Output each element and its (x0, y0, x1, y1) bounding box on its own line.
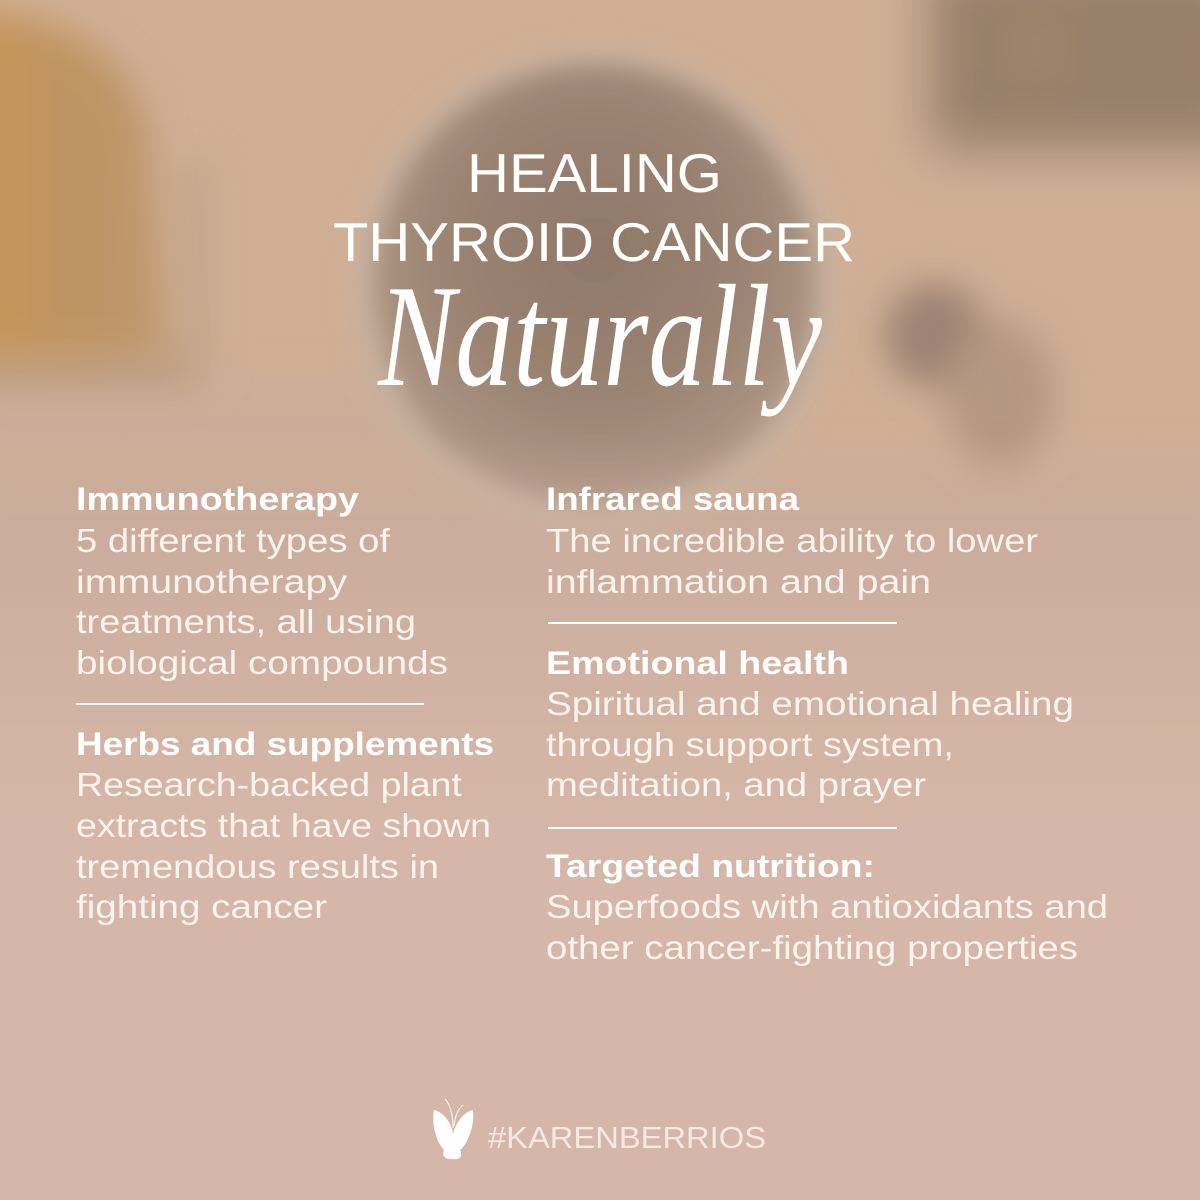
item: emotional health: Spiritual and emotional healing (546, 685, 1074, 722)
item: infrared sauna: inflammation and pain (546, 563, 931, 600)
item: emotional health (546, 645, 1074, 803)
icon: butterfly logo (433, 1099, 473, 1159)
item: targeted nutrition: Superfoods with antioxidants and (546, 888, 1108, 925)
right column (546, 481, 1108, 966)
footer brand (433, 1099, 766, 1159)
item: targeted nutrition: other cancer-fighting properties (546, 929, 1078, 966)
title line: thyroid cancer: THYROID CANCER (333, 211, 855, 273)
item: infrared sauna: The incredible ability to lower (546, 522, 1038, 559)
title line: healing: HEALING (467, 142, 722, 204)
item: herbs and supplements: Research-backed plant (76, 766, 462, 803)
title (333, 142, 855, 417)
item: targeted nutrition (546, 848, 1108, 966)
item: herbs and supplements: tremendous results in (76, 848, 439, 885)
left column (76, 481, 494, 925)
script word: naturally: Naturally (376, 255, 822, 417)
item: herbs and supplements: extracts that have shown (76, 807, 491, 844)
item: immunotherapy (76, 481, 448, 681)
item: immunotherapy: Immunotherapy (76, 481, 359, 517)
item: emotional health: meditation, and prayer (546, 766, 926, 803)
item: immunotherapy: 5 different types of (76, 522, 391, 559)
item: emotional health: through support system, (546, 726, 954, 763)
item: emotional health: Emotional health (546, 645, 849, 681)
item: immunotherapy: immunotherapy (76, 563, 348, 600)
item: herbs and supplements (76, 726, 494, 925)
item: targeted nutrition: Targeted nutrition: (546, 848, 875, 884)
item: immunotherapy: treatments, all using (76, 603, 416, 640)
item: herbs and supplements: fighting cancer (76, 888, 327, 925)
hashtag: #KARENBERRIOS (488, 1120, 766, 1155)
item: infrared sauna (546, 481, 1038, 600)
item: infrared sauna: Infrared sauna (546, 481, 799, 517)
item: herbs and supplements: Herbs and supplements (76, 726, 494, 762)
item: immunotherapy: biological compounds (76, 644, 448, 681)
